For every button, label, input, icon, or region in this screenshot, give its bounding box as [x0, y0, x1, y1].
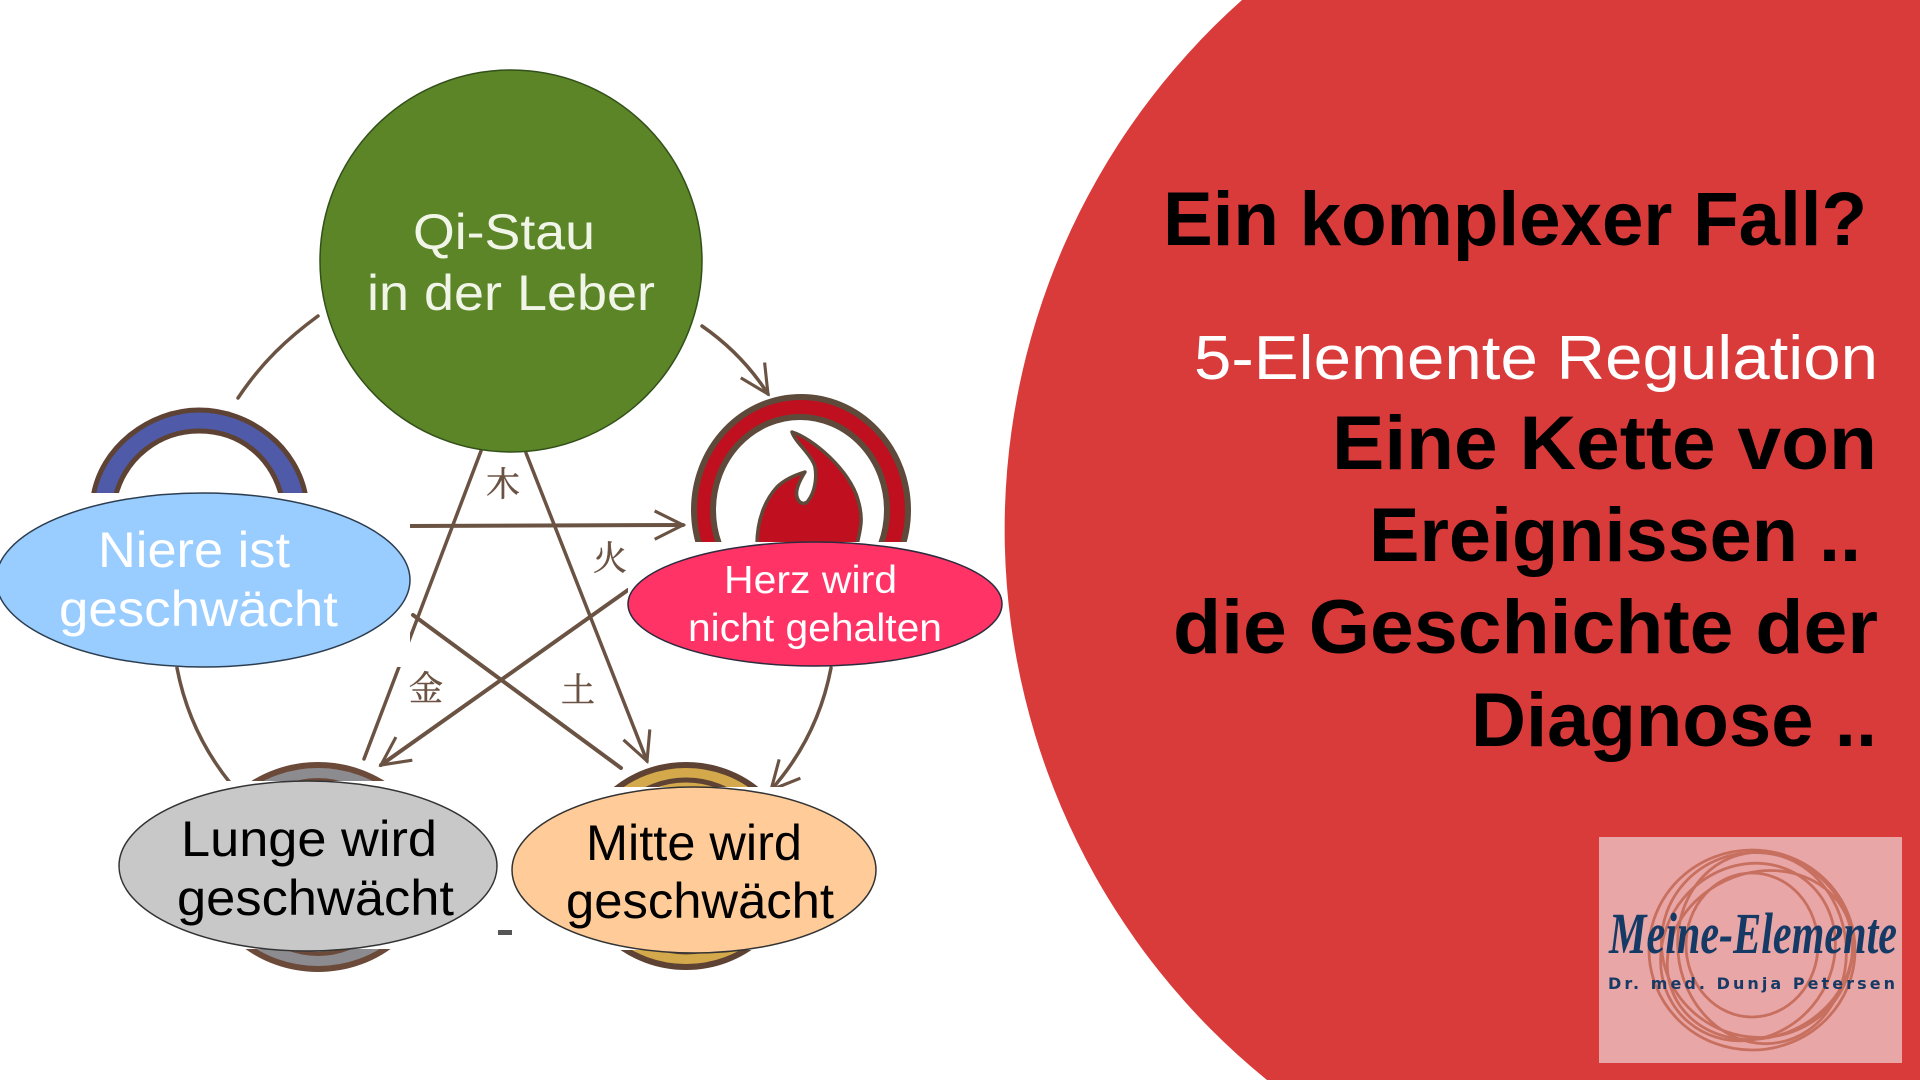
white backing: [0, 493, 410, 667]
white backing: [512, 787, 875, 950]
white backing: [119, 781, 497, 949]
kanji: wood: 木: [486, 457, 520, 506]
node: Niere: [0, 410, 410, 667]
label: Herz wird nicht gehalten: nicht gehalten: [688, 607, 942, 650]
node: Mitte: [512, 765, 876, 967]
text block: chain of events: die Geschichte der: [1173, 585, 1878, 670]
icon: fire ring: [694, 397, 908, 623]
ellipse: center: [512, 787, 876, 953]
ellipse: heart: [628, 542, 1002, 666]
label: Qi-Stau in der Leber: Qi-Stau: [413, 204, 595, 260]
kanji: fire: 火: [593, 531, 627, 580]
label: Niere ist geschwächt: Niere ist: [98, 522, 290, 578]
small dash mark: [498, 930, 512, 935]
kanji: earth: 土: [561, 663, 595, 712]
logo: Meine-Elemente: [1599, 826, 1902, 1076]
ellipse: lung: [119, 781, 497, 951]
label: Herz wird nicht gehalten: Herz wird: [724, 559, 897, 602]
five elements cycle diagram: [0, 70, 1003, 969]
label: Lunge wird geschwächt: Lunge wird: [181, 811, 437, 867]
text block: chain of events: Diagnose ..: [1471, 678, 1877, 763]
text block: chain of events: Eine Kette von: [1332, 401, 1877, 486]
logo background: [1599, 837, 1902, 1063]
white backing: [628, 542, 1003, 666]
panel: red circle: [1005, 0, 1920, 1080]
node: Leber: [320, 70, 702, 452]
ellipse: kidney: [0, 493, 410, 667]
icon: water arc: [93, 410, 306, 498]
icon: metal ring: [205, 765, 431, 969]
logo rings: [1625, 826, 1881, 1076]
subheading: 5-Elemente Regulation: 5-Elemente Regulation: [1194, 324, 1878, 393]
logo author line: Dr. med. Dunja Petersen: [1608, 974, 1895, 993]
label: Mitte wird geschwächt: geschwächt: [566, 873, 834, 929]
icon: earth ring: [578, 765, 794, 967]
node: Lunge: [119, 765, 497, 969]
icon: flame: [757, 432, 861, 545]
kanji: metal: 金: [409, 661, 443, 710]
text block: chain of events: [1173, 401, 1878, 763]
label: Niere ist geschwächt: geschwächt: [59, 581, 338, 637]
arrows: outer cycle and pentagram: [177, 316, 831, 790]
heading: Ein komplexer Fall: Ein komplexer Fall?: [1163, 177, 1867, 262]
label: Qi-Stau in der Leber: in der Leber: [367, 265, 655, 321]
node: Herz: [628, 397, 1003, 666]
label: Mitte wird geschwächt: Mitte wird: [586, 815, 802, 871]
label: Lunge wird geschwächt: geschwächt: [177, 870, 454, 926]
text block: chain of events: Ereignissen ..: [1369, 493, 1861, 578]
circle: liver: [320, 70, 702, 452]
